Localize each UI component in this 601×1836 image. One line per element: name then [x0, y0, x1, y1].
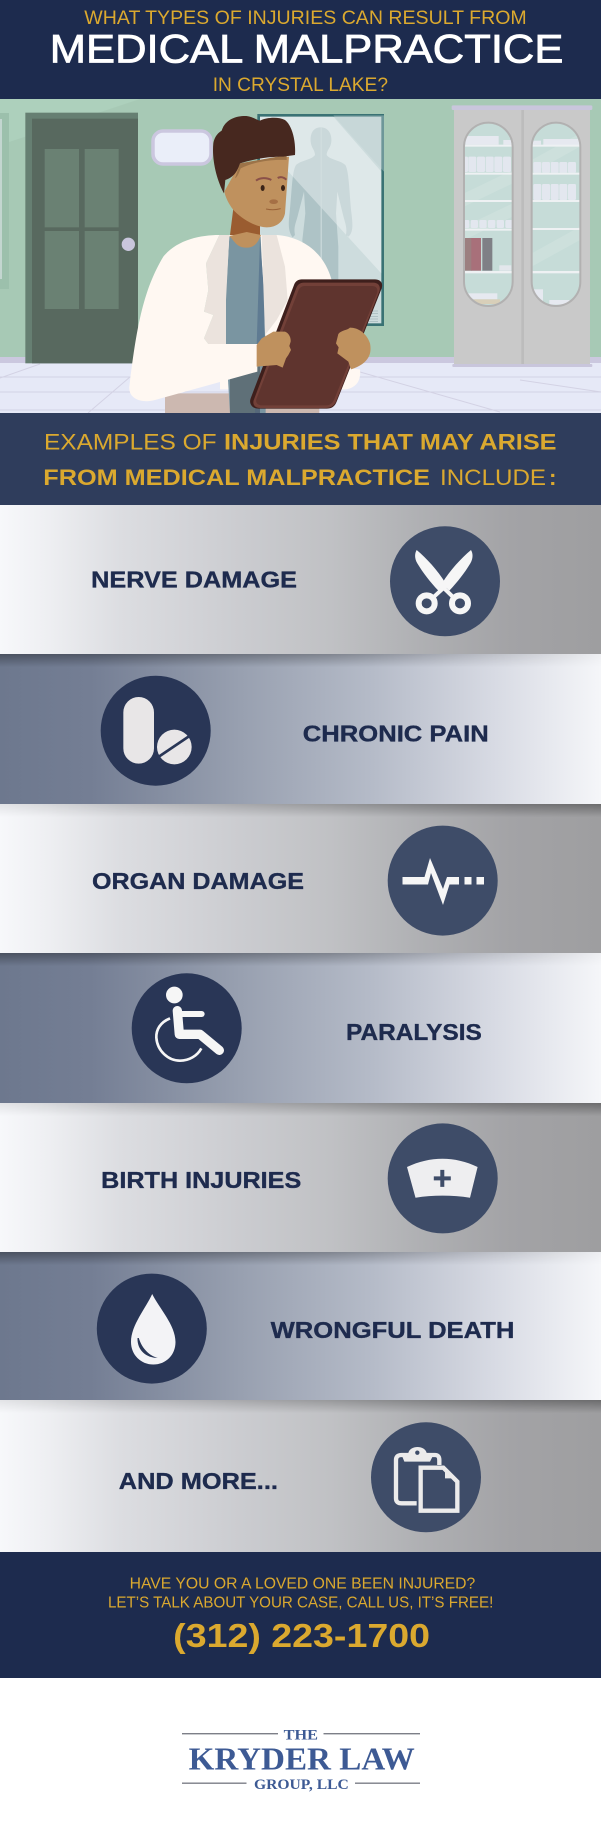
clipboard [250, 279, 382, 409]
title: in crystal lake: IN CRYSTAL LAKE? [213, 74, 388, 96]
eyes [261, 185, 265, 191]
coat lapels [204, 235, 229, 344]
subheading line 2 [43, 465, 556, 490]
subheading line 1: EXAMPLES OF [44, 429, 217, 454]
row: paralysis [0, 953, 601, 1103]
coat sleeve [129, 235, 257, 401]
row: wrongful death [0, 1252, 601, 1400]
label: NERVE DAMAGE [91, 567, 297, 593]
title: medical malpractice: MEDICAL MALPRACTICE [50, 28, 563, 72]
x-ray poster [259, 115, 384, 325]
icon: clipboard and document [371, 1422, 481, 1532]
wall sign [153, 131, 211, 164]
row: birth injuries [0, 1103, 601, 1252]
icon: nurse cap [388, 1123, 498, 1233]
left cabinet window [465, 124, 512, 305]
label: WRONGFUL DEATH [271, 1317, 514, 1343]
nose and mouth [269, 199, 278, 204]
wall [0, 99, 601, 359]
icon: scissors [390, 526, 500, 636]
left window edge [0, 113, 9, 289]
left hand [257, 332, 291, 368]
phone number: (312) 223-1700 [173, 1617, 430, 1654]
logo: kryder law: KRYDER LAW [189, 1740, 415, 1776]
neck [230, 208, 260, 235]
coat back [220, 235, 360, 389]
face [224, 157, 289, 227]
door [25, 113, 138, 363]
illustration: doctor in clinic room [0, 99, 601, 414]
subheading line 2: : [549, 465, 556, 490]
prompt line 1: HAVE YOU OR A LOVED ONE BEEN INJURED? [130, 1576, 475, 1593]
subheading line 1: INJURIES THAT MAY ARISE [224, 429, 557, 454]
prompt line 2: LET’S TALK ABOUT YOUR CASE, CALL US, IT’S FREE! [108, 1594, 493, 1612]
subheading banner [0, 413, 601, 505]
icon: heartbeat [388, 826, 498, 936]
footer call to action [0, 1552, 601, 1678]
row: organ damage [0, 804, 601, 953]
row: chronic pain [0, 654, 601, 804]
label: PARALYSIS [346, 1019, 482, 1045]
hair shadow [235, 155, 287, 178]
subheading line 1 [44, 429, 557, 454]
logo: group llc: GROUP, LLC [254, 1777, 349, 1793]
baseboard [0, 357, 601, 363]
door knob [122, 238, 135, 251]
label: CHRONIC PAIN [303, 720, 489, 746]
header banner [0, 0, 601, 99]
hair [213, 116, 295, 193]
cabinet [452, 105, 592, 367]
doctor figure [129, 116, 382, 414]
icon: pills [101, 676, 211, 786]
floor [0, 363, 601, 413]
label: BIRTH INJURIES [101, 1167, 301, 1193]
shirt [226, 237, 266, 414]
right cabinet window [532, 123, 580, 306]
row: and more [0, 1400, 601, 1552]
subheading line 2: INCLUDE [440, 465, 546, 490]
right hand [336, 328, 371, 369]
icon: wheelchair [132, 973, 242, 1083]
icon: drop [97, 1274, 207, 1384]
label: AND MORE... [119, 1468, 278, 1494]
eyebrows [256, 177, 286, 181]
logo: the: THE [284, 1727, 318, 1743]
trousers [165, 393, 232, 414]
label: ORGAN DAMAGE [92, 868, 304, 894]
subheading line 2: FROM MEDICAL MALPRACTICE [43, 465, 430, 490]
row: nerve damage [0, 505, 601, 654]
title: what types of injuries: WHAT TYPES OF INJURIES CAN RESULT FROM [84, 7, 527, 29]
logo: the kryder law group [182, 1727, 420, 1793]
